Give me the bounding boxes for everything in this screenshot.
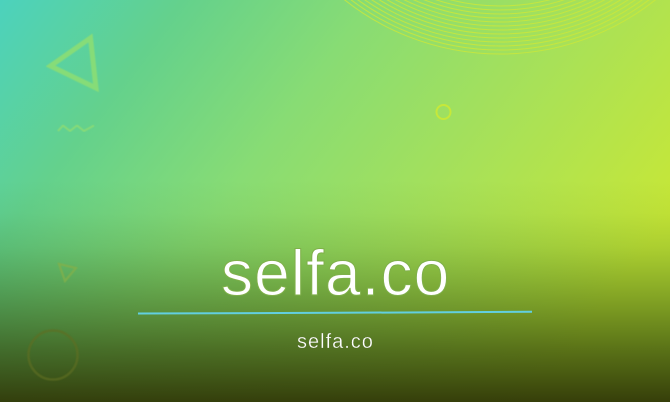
- dark bottom shade: [0, 180, 670, 402]
- icon: large triangle outline: [50, 38, 96, 88]
- subtitle: selfa.co: [297, 331, 374, 353]
- icon: small yellow circle: [436, 105, 450, 119]
- icon: small dim triangle: [59, 264, 76, 281]
- icon: squiggle: [58, 126, 94, 131]
- title: selfa.co: [221, 237, 450, 309]
- icon: dim large circle: [28, 330, 78, 380]
- divider line: [138, 312, 532, 314]
- concentric arcs: [250, 0, 670, 54]
